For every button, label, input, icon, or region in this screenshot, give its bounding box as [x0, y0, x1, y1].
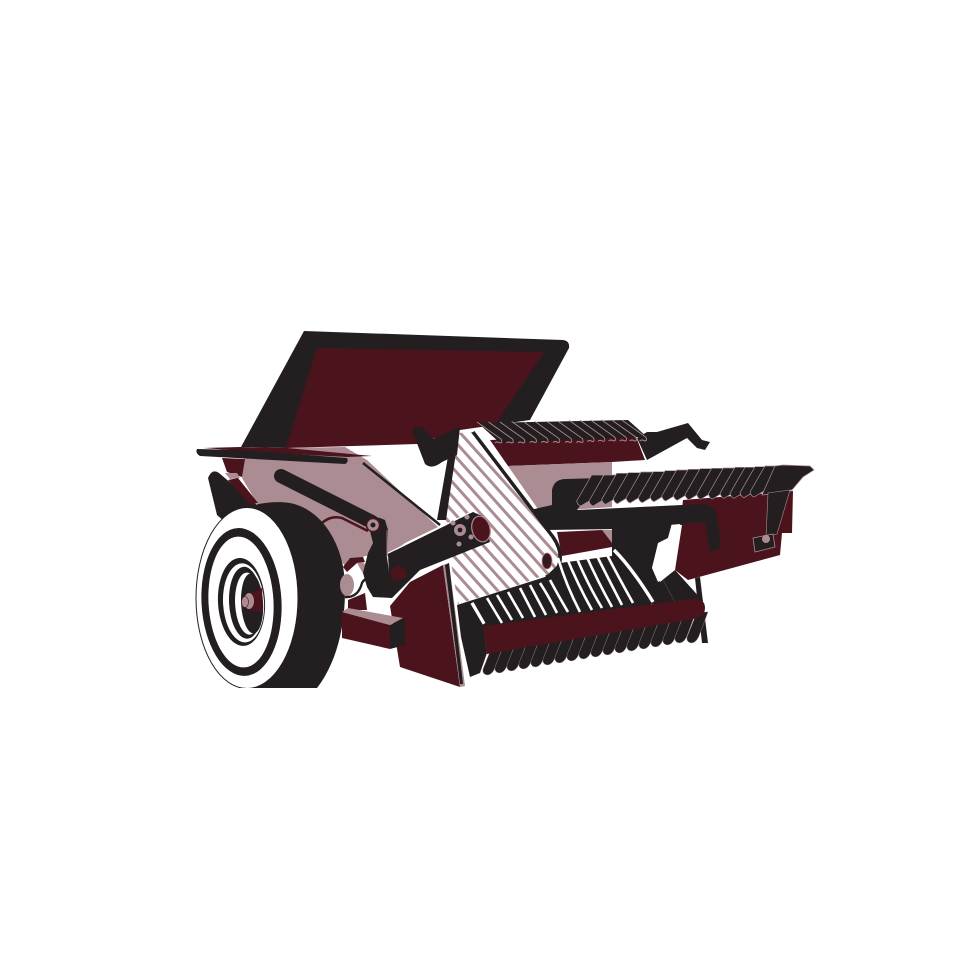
arm — [388, 511, 493, 598]
frame line — [363, 463, 440, 525]
wheel rings — [198, 526, 285, 678]
wheel hub — [242, 588, 263, 612]
wedge line — [663, 580, 675, 602]
hopper — [241, 331, 569, 448]
upper rear frame — [490, 434, 645, 556]
left bracket — [208, 458, 258, 522]
side panel — [242, 447, 438, 566]
front plate — [390, 563, 465, 687]
black tail arm — [637, 423, 710, 460]
lower right maroon box — [675, 491, 793, 580]
tyre — [196, 502, 345, 688]
central black column — [612, 523, 702, 612]
pivot — [340, 557, 377, 610]
illustration: wheeled farm machine — [196, 331, 814, 688]
handle — [530, 478, 721, 552]
shelf — [196, 447, 372, 464]
long lever — [281, 476, 372, 531]
lower comb — [457, 550, 665, 636]
white cut-out — [652, 525, 682, 582]
upper comb tines — [477, 420, 647, 443]
front bar — [483, 599, 705, 654]
lower comb teeth — [483, 612, 708, 675]
post — [695, 577, 708, 643]
lower comb end block — [457, 603, 487, 677]
triangular striped panel — [446, 431, 562, 604]
front comb tines — [577, 465, 814, 506]
strut and knuckle — [413, 427, 460, 520]
block — [342, 608, 405, 649]
bracket — [363, 518, 410, 598]
comb bracket — [753, 490, 790, 552]
